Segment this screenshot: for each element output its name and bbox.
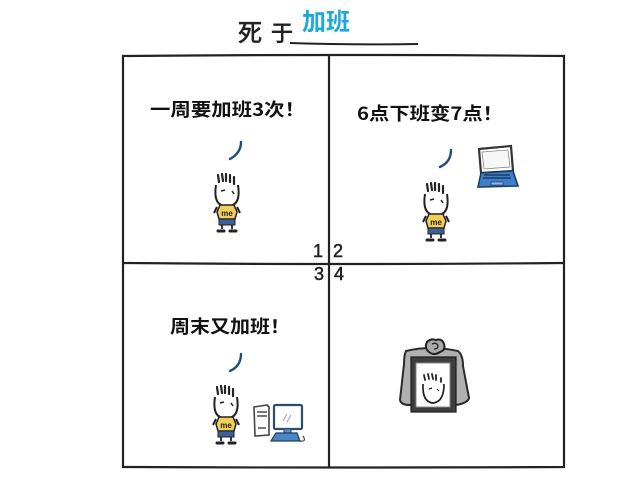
- panel 3 caption: 周末又加班！: [170, 313, 290, 339]
- portrait card: [416, 363, 450, 407]
- flower: [426, 339, 444, 354]
- icon: laptop: [478, 146, 518, 187]
- panel 3 character: me: [220, 421, 232, 430]
- panel 2 caption: 6点下班变7点！: [357, 100, 503, 126]
- panel 1 caption: 一周要加班3次！: [150, 96, 305, 122]
- panel 1 character: [214, 174, 240, 231]
- panel numbers: 4: [334, 264, 344, 284]
- drape: [400, 348, 469, 405]
- panel 1 speech mark: [230, 142, 241, 159]
- memorial portrait: [400, 339, 469, 412]
- title: 死: [238, 13, 262, 48]
- title: 加班: [302, 2, 350, 37]
- title: 于: [271, 16, 293, 48]
- panel numbers: 3: [314, 264, 324, 284]
- frame: [411, 357, 456, 412]
- panel 2 speech mark: [440, 150, 451, 167]
- portrait face: [423, 374, 444, 403]
- panel 3 character: [213, 386, 239, 443]
- icon: desktop computer: [254, 405, 304, 441]
- panel 1 character: me: [221, 209, 233, 218]
- four-panel grid: [123, 55, 564, 468]
- title: [238, 2, 418, 48]
- panel numbers: 2: [333, 241, 343, 261]
- panel 2 character: me: [430, 218, 442, 227]
- panel 3 speech mark: [230, 354, 241, 371]
- panel numbers: [313, 241, 344, 284]
- panel numbers: 1: [313, 241, 323, 261]
- panel 2 character: [423, 183, 449, 240]
